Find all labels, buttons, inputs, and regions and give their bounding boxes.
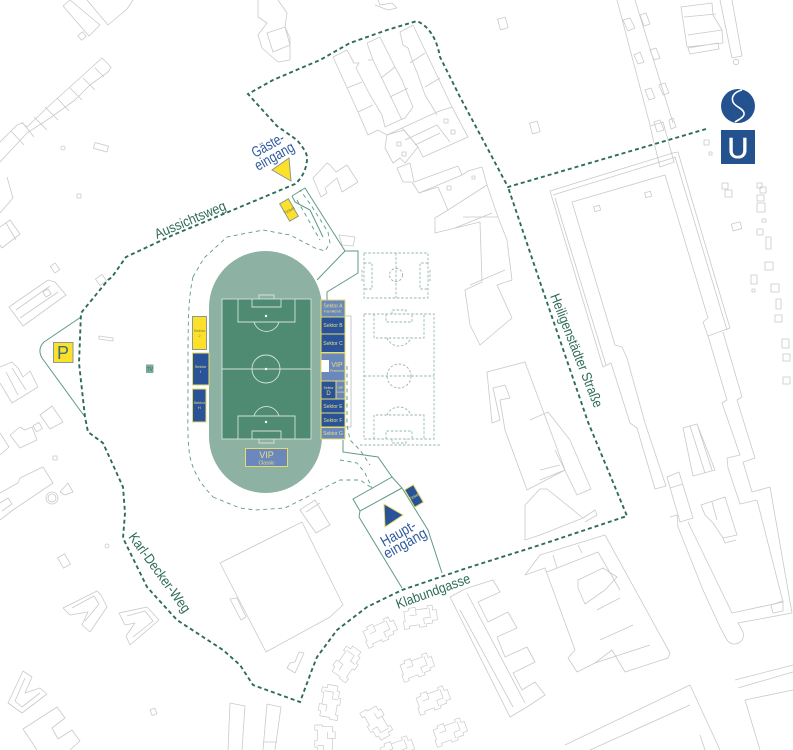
sector: VIP Classic: Classic bbox=[258, 460, 275, 466]
sector G: Sektor G bbox=[323, 431, 343, 437]
sector F: Sektor F bbox=[324, 418, 342, 424]
sector A bbox=[321, 300, 345, 317]
VIP Comfort: VIP bbox=[338, 386, 344, 390]
icon: main entrance triangle bbox=[384, 504, 403, 527]
football pitch bbox=[222, 295, 311, 443]
sector E: Sektor E bbox=[323, 404, 343, 410]
icon: guest entrance triangle bbox=[272, 158, 291, 181]
visitor route bbox=[79, 21, 706, 702]
main ticket box: Ticket bbox=[408, 491, 421, 502]
sector D bbox=[321, 381, 336, 399]
sector J: J bbox=[198, 333, 200, 338]
east stands bbox=[321, 300, 351, 439]
icon: S-Bahn bbox=[721, 89, 755, 123]
sector H bbox=[192, 389, 206, 422]
icon: U-Bahn: U bbox=[728, 133, 748, 165]
road label: Karl-Decker-Weg: Karl-Decker-Weg bbox=[126, 529, 194, 616]
VIP Comfort bbox=[336, 381, 345, 399]
buildings: north west bbox=[0, 0, 290, 520]
main entrance label: Haupt- bbox=[378, 517, 419, 550]
sector I bbox=[192, 353, 209, 385]
VIP Premium: VIP bbox=[331, 362, 343, 369]
VIP Premium bbox=[321, 353, 345, 381]
gray corridor bbox=[345, 316, 351, 427]
guest entrance label: Gäste- bbox=[249, 130, 288, 161]
parking sign bbox=[54, 342, 73, 363]
main ticket box bbox=[404, 484, 425, 508]
stadium bbox=[209, 251, 322, 493]
TV box: TV bbox=[147, 367, 154, 373]
main entrance label: eingang bbox=[381, 525, 430, 562]
parking sign: P bbox=[57, 343, 69, 363]
guest entrance lane bbox=[292, 188, 358, 300]
main entrance forecourt bbox=[343, 440, 442, 588]
guest ticket box: Ticket bbox=[283, 205, 296, 216]
TV box bbox=[146, 364, 154, 373]
pitch: north training field bbox=[362, 253, 430, 298]
road label: Heiligenstädter Straße: Heiligenstädter Straße bbox=[547, 291, 607, 410]
training pitches bbox=[360, 253, 440, 445]
VIP Premium: Premium bbox=[330, 369, 344, 373]
parking area outline bbox=[40, 317, 85, 417]
buildings: south west bbox=[8, 500, 343, 750]
sector A: Familienb. bbox=[324, 308, 342, 314]
buildings: north centre bbox=[313, 0, 540, 345]
sector H: Sektor bbox=[194, 400, 206, 405]
buildings: south east bbox=[315, 362, 793, 750]
guest ticket box bbox=[279, 198, 300, 222]
road label: Klabundgasse: Klabundgasse bbox=[394, 570, 472, 612]
buildings: east railway bbox=[550, 0, 792, 644]
sector I: I bbox=[200, 369, 201, 374]
pitch: south training field bbox=[360, 310, 440, 445]
sector J: Sektor bbox=[194, 328, 206, 333]
sector J bbox=[192, 316, 206, 350]
sector D: D bbox=[326, 391, 331, 397]
road label: Aussichtsweg: Aussichtsweg bbox=[152, 197, 228, 242]
entrance outlines bbox=[292, 188, 442, 588]
inner footpaths bbox=[188, 190, 372, 510]
sector: VIP Classic: VIP bbox=[259, 450, 274, 460]
west stands bbox=[192, 316, 209, 422]
VIP Comfort: Comfort bbox=[336, 391, 345, 394]
sector H: H bbox=[198, 405, 201, 410]
icon: U-Bahn bbox=[721, 130, 755, 165]
sector B: Sektor B bbox=[323, 323, 343, 329]
sector D: Sektor bbox=[323, 386, 334, 390]
track bbox=[209, 251, 322, 493]
sector A: Sektor A bbox=[324, 304, 343, 310]
sector C: Sektor C bbox=[323, 341, 343, 347]
sector: VIP Classic bbox=[246, 448, 288, 466]
sector I: Sektor bbox=[195, 364, 207, 369]
guest entrance label: eingang bbox=[252, 139, 298, 174]
